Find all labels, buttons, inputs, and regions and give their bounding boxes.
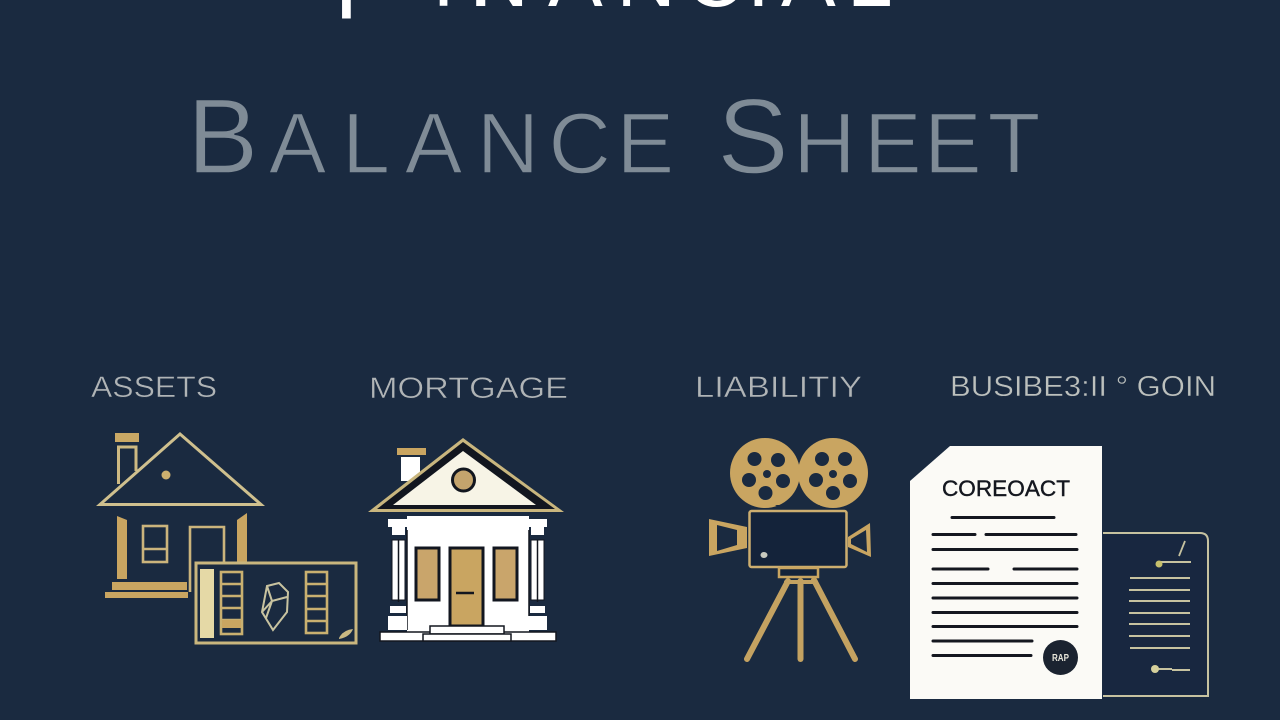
right column <box>527 519 547 630</box>
house steps <box>105 582 188 598</box>
contract sheet <box>910 446 1102 699</box>
label: mortgage: MORTGAGE <box>369 372 568 405</box>
camera lens right <box>848 523 871 557</box>
contract seal <box>1043 640 1078 675</box>
bank left window <box>416 548 439 600</box>
tripod <box>747 580 855 659</box>
house window <box>143 526 167 562</box>
icon: contract documents <box>910 446 1208 699</box>
house roof <box>100 434 261 504</box>
heading: balance sheet: S <box>717 76 789 196</box>
roof vent <box>162 470 170 480</box>
pediment <box>393 451 536 505</box>
contract text lines <box>933 518 1077 656</box>
house door <box>190 527 224 592</box>
bank door <box>450 548 483 626</box>
camera body <box>750 505 846 577</box>
icon: film camera on tripod <box>709 438 871 659</box>
pediment roundel <box>452 469 474 491</box>
bank walls <box>407 516 529 632</box>
heading: balance sheet: HEET <box>793 96 1040 192</box>
house chimney <box>115 433 139 484</box>
banknote <box>196 563 356 643</box>
title: clipped top line <box>335 0 893 36</box>
camera lens left <box>709 519 747 556</box>
left column <box>388 519 409 630</box>
back document <box>1103 533 1208 696</box>
film reels <box>730 438 868 508</box>
heading: balance sheet: ALANCE <box>269 96 674 192</box>
contract title: COREOACT <box>942 476 1070 501</box>
bank right window <box>494 548 517 600</box>
heading: balance sheet <box>187 76 1040 196</box>
house walls <box>117 513 247 579</box>
label: assets: ASSETS <box>91 371 217 404</box>
label: liability: LIABILITIY <box>695 371 862 404</box>
contract seal: RAP <box>1052 653 1069 664</box>
label: business: BUSIBE3:II ° GOIN <box>950 371 1216 403</box>
heading: balance sheet: B <box>187 76 258 196</box>
icon: house with banknote <box>100 433 356 643</box>
icon: bank building <box>368 438 564 641</box>
bank steps <box>380 626 556 641</box>
bank chimney <box>397 448 426 481</box>
bank roof <box>368 438 564 512</box>
